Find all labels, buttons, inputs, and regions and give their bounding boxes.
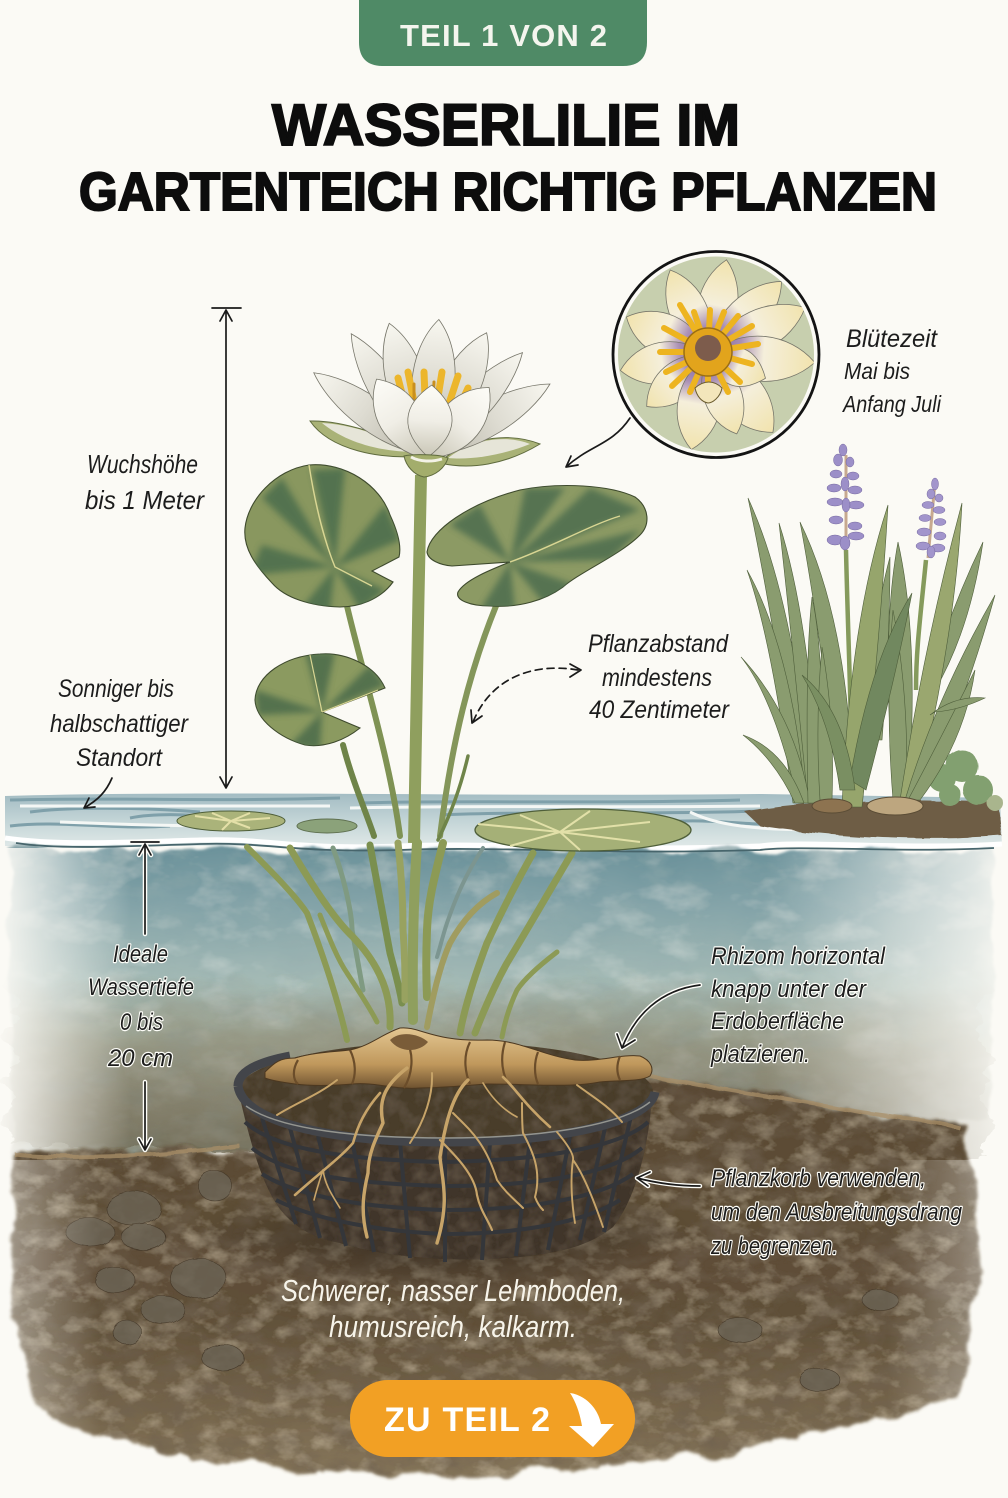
caption: soil: humusreich, kalkarm.: [329, 1309, 577, 1344]
top badge: TEIL 1 VON 2: [400, 18, 607, 53]
arrow: basket: [637, 1172, 700, 1186]
water depth measure: [131, 842, 159, 1150]
caption: bloom time: Mai bis: [844, 358, 910, 384]
caption: rhizome: platzieren.: [710, 1041, 810, 1068]
caption: bloom time: Blütezeit: [846, 325, 938, 353]
leaf: lower left: [255, 652, 385, 750]
companion plant: reed and lavender: [741, 444, 1003, 838]
water lily flower: [304, 318, 558, 477]
soil stones: [66, 1171, 898, 1392]
calyx: [404, 455, 448, 477]
title: GARTENTEICH RICHTIG PFLANZEN: [79, 162, 937, 222]
caption: rhizome: [710, 943, 886, 1068]
caption: bloom time: [841, 325, 942, 417]
soil in basket: [237, 1042, 653, 1142]
roots: [277, 1068, 622, 1243]
leaf stems above water: [343, 606, 496, 840]
caption: basket: [710, 1165, 963, 1260]
arrow: detail to flower: [566, 418, 630, 467]
arrow: rhizome: [617, 985, 700, 1048]
sepals: [310, 421, 540, 466]
island: [745, 800, 1002, 838]
caption: planting distance: 40 Zentimeter: [589, 696, 731, 724]
caption: planting distance: [588, 630, 731, 724]
leaf: upper left: [245, 465, 400, 612]
dashed arrow: planting distance: [471, 664, 581, 723]
caption: rhizome: Rhizom horizontal: [711, 943, 886, 970]
caption: location: Sonniger bis: [58, 675, 174, 703]
detail circle: bloom: [613, 252, 819, 458]
caption: growth height: [85, 449, 205, 515]
height measure arrow: [212, 308, 241, 788]
caption: growth height: bis 1 Meter: [85, 485, 205, 515]
caption: location: Standort: [76, 744, 163, 772]
caption: basket: um den Ausbreitungsdrang: [711, 1199, 963, 1226]
soil top edge: [14, 1076, 960, 1157]
caption: rhizome: Erdoberfläche: [711, 1008, 844, 1035]
title: [79, 93, 937, 222]
caption: basket: zu begrenzen.: [710, 1233, 838, 1260]
soil ground: [0, 1076, 1008, 1480]
caption: water depth: 20 cm: [107, 1045, 173, 1072]
shrub: [928, 750, 1003, 811]
underwater stems: [247, 843, 572, 1040]
title: WASSERLILIE IM: [272, 93, 740, 158]
shallow floating leaves: [177, 811, 357, 833]
caption: rhizome: knapp unter der: [711, 976, 867, 1003]
caption: water depth: 0 bis: [120, 1009, 163, 1036]
front petals: [358, 368, 506, 472]
water surface band: [5, 793, 1002, 848]
top badge: [359, 0, 647, 66]
underwater area: [0, 843, 1008, 1170]
caption: growth height: Wuchshöhe: [87, 449, 198, 479]
large floating leaf: [475, 809, 691, 851]
caption: location: halbschattiger: [50, 710, 189, 738]
stamens: [394, 372, 468, 428]
basket: [237, 1042, 655, 1262]
lavender spike left: [827, 444, 864, 550]
blades: [741, 498, 995, 807]
caption: soil: Schwerer, nasser Lehmboden,: [281, 1273, 625, 1308]
caption: water depth: Ideale: [113, 941, 168, 968]
caption: planting distance: Pflanzabstand: [588, 630, 729, 658]
caption: water depth: Wassertiefe: [88, 974, 194, 1001]
caption: bloom time: Anfang Juli: [841, 391, 942, 417]
back petals: [304, 318, 558, 469]
button: to part 2: [350, 1380, 635, 1457]
arrow: location to water: [84, 778, 112, 808]
caption: soil: [281, 1273, 625, 1344]
main flower stem: [414, 475, 421, 843]
grid: [245, 1112, 648, 1262]
rhizome: [265, 1028, 652, 1088]
caption: water depth: [88, 941, 194, 1072]
button: to part 2: ZU TEIL 2: [384, 1401, 550, 1439]
caption: planting distance: mindestens: [602, 664, 712, 692]
lavender spike right: [916, 478, 946, 558]
icon: curved arrow: [569, 1393, 614, 1447]
rocks: [867, 797, 923, 815]
caption: location: [50, 675, 189, 772]
rim: [238, 1056, 655, 1142]
leaf: upper right: [427, 486, 647, 610]
caption: basket: Pflanzkorb verwenden,: [711, 1165, 926, 1192]
stems of spikes: [846, 550, 926, 800]
